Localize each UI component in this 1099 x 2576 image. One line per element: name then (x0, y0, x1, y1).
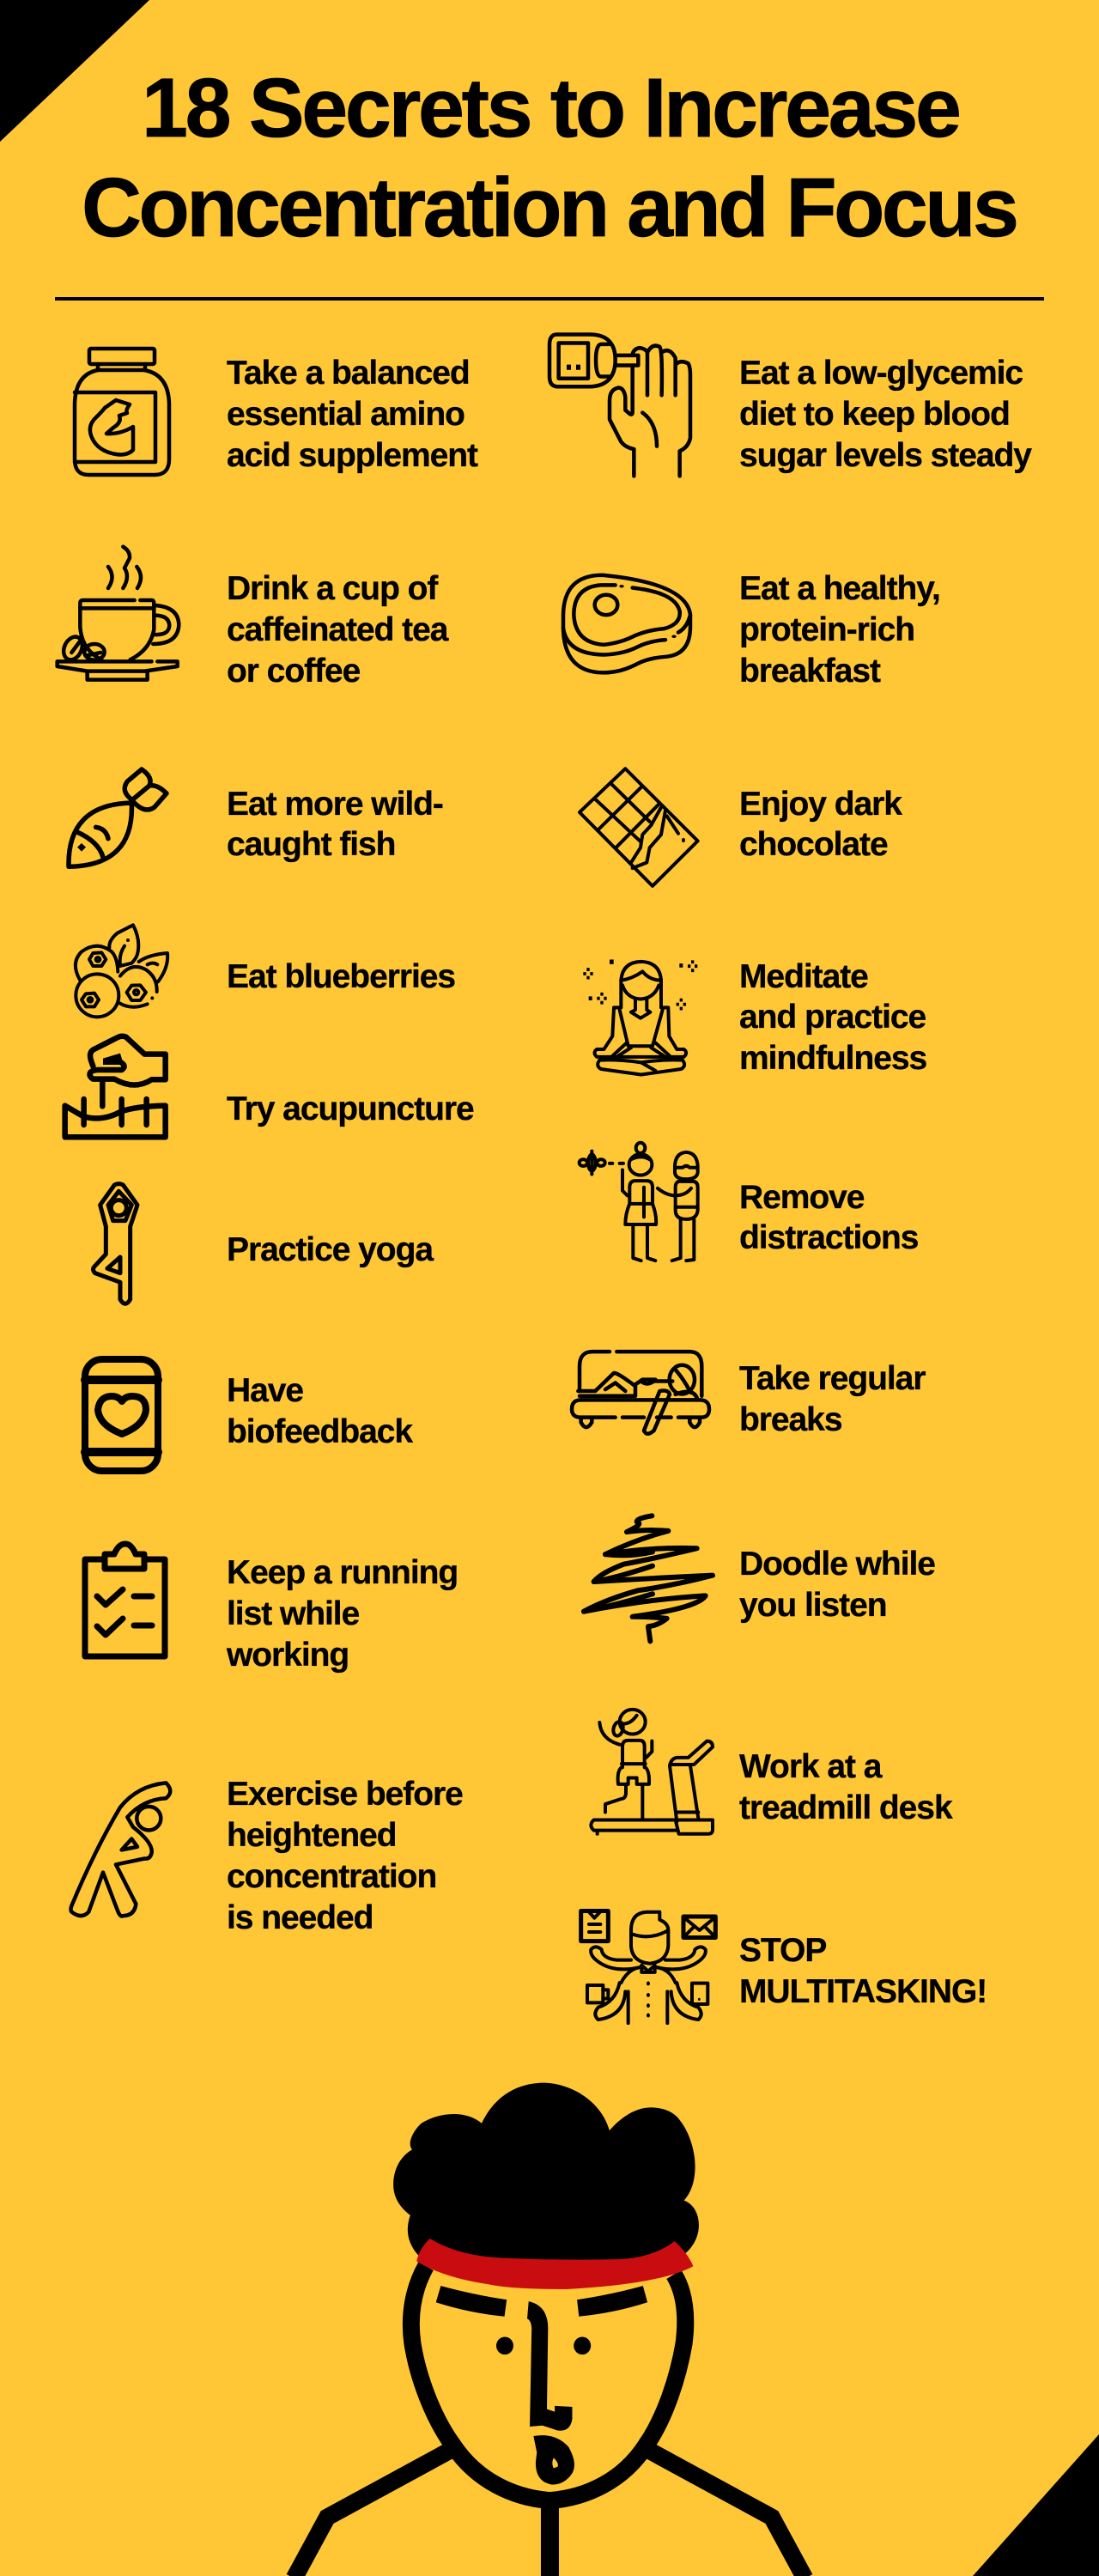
text: breaks: Take regular (739, 1360, 926, 1397)
illustration: focused man with headband (294, 2083, 805, 2576)
item: doodle (584, 1516, 935, 1641)
text: chocolate (739, 786, 902, 863)
text: breakfast: Eat a healthy, (739, 570, 940, 607)
title (82, 61, 1019, 254)
text: biofeedback: biofeedback (227, 1413, 413, 1450)
headband (416, 2239, 693, 2289)
text: meditate: mindfulness (739, 1040, 927, 1077)
item: remove distractions (580, 1143, 919, 1261)
icon: clipboard checklist (85, 1544, 165, 1656)
icon: blueberries (76, 925, 167, 1017)
text: amino acid: acid supplement (227, 437, 478, 474)
icon: coffee cup (58, 547, 179, 680)
text: multitasking: MULTITASKING! (739, 1973, 987, 2010)
icon: glucose meter and hand (550, 335, 690, 476)
text: exercise: is needed (227, 1899, 373, 1936)
text: acupuncture: Try acupuncture (227, 1091, 474, 1127)
text: meditate (739, 958, 927, 1077)
text: fish: caught fish (227, 826, 395, 863)
item: amino acid supplement (75, 349, 478, 475)
text: running list: list while (227, 1595, 360, 1632)
icon: two people and a bee (580, 1143, 698, 1261)
icon: phone with heart (85, 1359, 158, 1471)
text: tea or coffee: caffeinated tea (227, 611, 449, 648)
text: tea or coffee (227, 570, 449, 690)
text: multitasking: STOP (739, 1932, 826, 1969)
icon: fish (69, 769, 167, 866)
item: running list (85, 1544, 458, 1674)
item: regular breaks (572, 1352, 926, 1438)
item: biofeedback (85, 1359, 413, 1471)
text: meditate: Meditate (739, 958, 868, 995)
icon: supplement bottle (75, 349, 169, 475)
text: breakfast (739, 570, 940, 690)
text: fish (227, 786, 443, 863)
item: meditate (583, 958, 927, 1077)
icon: chocolate bar (580, 769, 698, 886)
nose (527, 2301, 572, 2431)
item: yoga (93, 1184, 434, 1303)
text: meditate: and practice (739, 999, 926, 1036)
text: treadmill: Work at a (739, 1748, 883, 1785)
text: amino acid (227, 355, 478, 474)
text: tea or coffee: or coffee (227, 653, 361, 690)
text: treadmill (739, 1748, 953, 1826)
head outline (411, 2266, 685, 2500)
icon: person on treadmill (591, 1710, 713, 1834)
text: chocolate: chocolate (739, 826, 888, 863)
eyes (496, 2336, 513, 2354)
item: fish (69, 769, 443, 866)
icon: acupuncture hand (65, 1036, 166, 1137)
item: blueberries (76, 925, 455, 1017)
hair (393, 2083, 699, 2271)
text: biofeedback: Have (227, 1372, 303, 1409)
text: treadmill: treadmill desk (739, 1789, 953, 1826)
text: running list: Keep a running (227, 1554, 458, 1591)
icon: stretching figure (70, 1783, 170, 1917)
text: low-glycemic (739, 355, 1032, 474)
text: running list (226, 1554, 458, 1674)
text: biofeedback (227, 1372, 413, 1450)
text: low-glycemic: sugar levels steady (739, 437, 1032, 474)
item: exercise (70, 1776, 463, 1936)
corner triangle top left (0, 0, 149, 142)
text: tea or coffee: Drink a cup of (227, 570, 439, 607)
text: amino acid: essential amino (227, 396, 464, 433)
icon: yoga pose (93, 1184, 137, 1303)
text: breaks (739, 1360, 926, 1438)
icon: multitasking person (581, 1911, 715, 2023)
text: chocolate: Enjoy dark (739, 786, 902, 823)
text: doodle (739, 1546, 935, 1624)
item: stop multitasking (581, 1911, 987, 2023)
text: exercise: concentration (227, 1858, 436, 1895)
corner triangle bottom right (973, 2434, 1099, 2576)
text: breaks: breaks (739, 1401, 842, 1438)
item: low-glycemic diet (550, 335, 1032, 476)
text: exercise: heightened (227, 1817, 397, 1854)
text: doodle: you listen (739, 1587, 887, 1624)
item: caffeinated drink (58, 547, 449, 690)
text: exercise: Exercise before (227, 1776, 463, 1813)
icon: meditating person (583, 960, 697, 1074)
text: distractions: distractions (739, 1219, 919, 1256)
title: Concentration and Focus (82, 161, 1019, 254)
item: acupuncture (65, 1036, 474, 1137)
eyebrows (436, 2286, 647, 2317)
item: protein breakfast (563, 570, 940, 690)
mouth (533, 2435, 574, 2485)
text: distractions: Remove (739, 1179, 865, 1216)
shoulders and neck (294, 2451, 805, 2576)
text: fish: Eat more wild- (227, 786, 443, 823)
icon: doodle scribble (584, 1516, 713, 1641)
text: breakfast: protein-rich (739, 611, 914, 648)
item: treadmill desk (591, 1710, 953, 1834)
text: running list: working (226, 1637, 349, 1674)
text: doodle: Doodle while (739, 1546, 935, 1583)
text: breakfast: breakfast (739, 653, 881, 690)
icon: steak (563, 575, 690, 672)
title: 18 Secrets to Increase (142, 61, 962, 155)
text: yoga: Practice yoga (227, 1231, 434, 1268)
text: distractions (739, 1179, 919, 1256)
text: exercise (227, 1776, 463, 1936)
text: low-glycemic: diet to keep blood (739, 396, 1010, 433)
icon: person resting on couch (572, 1352, 709, 1434)
text: low-glycemic: Eat a low-glycemic (739, 355, 1023, 392)
text: multitasking (739, 1932, 987, 2010)
text: amino acid: Take a balanced (227, 355, 470, 392)
text: blueberries: Eat blueberries (227, 958, 455, 995)
item: dark chocolate (580, 769, 902, 886)
